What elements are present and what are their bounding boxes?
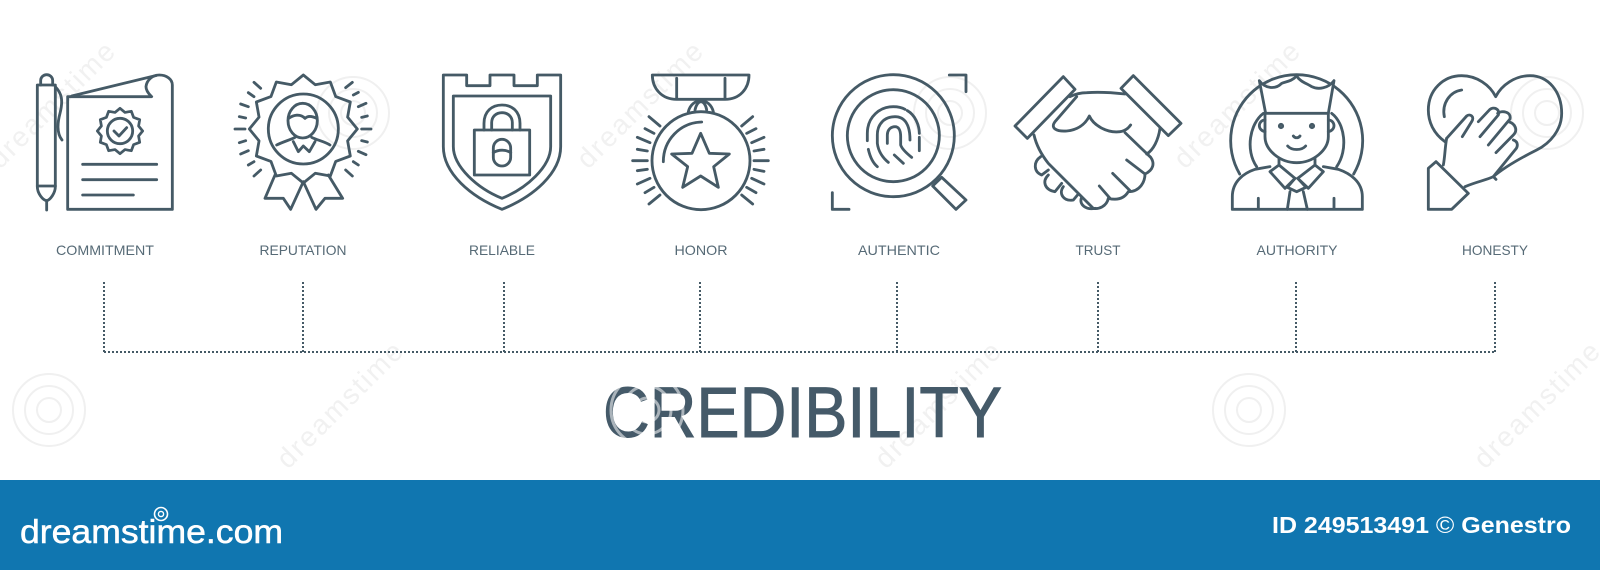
watermark: spirals and diagonal wordmarks behind icons: dreamstime xyxy=(570,36,709,174)
label: honor: HONOR xyxy=(674,242,728,258)
watermark: spirals and diagonal wordmarks behind icons: dreamstime xyxy=(1167,36,1306,174)
icon: commitment document and pen xyxy=(37,75,172,210)
footer bar xyxy=(0,480,1600,570)
label: reputation: REPUTATION xyxy=(260,242,346,258)
label: reliable: RELIABLE xyxy=(469,242,535,258)
icon: reliable shield with padlock xyxy=(443,75,561,209)
label: trust: TRUST xyxy=(1076,242,1121,258)
icon: authority crowned person xyxy=(1231,75,1363,209)
icon: honesty hand on heart xyxy=(1428,76,1562,209)
watermark: spirals and diagonal wordmarks behind icons xyxy=(0,36,1600,474)
footer logo: dreamstime.com: dreamstime.com xyxy=(20,513,283,550)
icon: reputation rosette xyxy=(235,75,371,209)
icon: authentic fingerprint magnifier xyxy=(832,75,966,209)
label: honesty: HONESTY xyxy=(1462,242,1529,258)
watermark: spiral over title xyxy=(611,374,683,446)
title: CREDIBILITY xyxy=(603,374,1002,453)
label: commitment: COMMITMENT xyxy=(56,242,154,258)
footer credit: image ID and author: ID 249513491 © Genestro xyxy=(1272,512,1571,538)
label: authority: AUTHORITY xyxy=(1256,242,1338,258)
icon: trust handshake xyxy=(1015,76,1181,209)
dotted connector bracket xyxy=(104,282,1495,352)
label: authentic: AUTHENTIC xyxy=(858,242,940,258)
watermark: spirals and diagonal wordmarks behind icons: dreamstime xyxy=(868,336,1007,474)
watermark: spirals and diagonal wordmarks behind icons: dreamstime xyxy=(270,336,409,474)
icon: honor medal xyxy=(633,75,768,210)
